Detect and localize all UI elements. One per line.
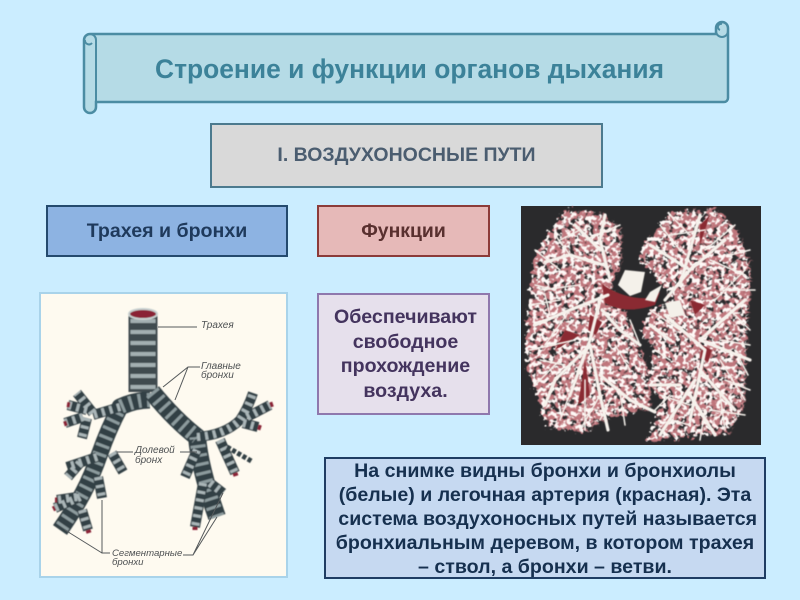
label: trachea and bronchi: Трахея и бронхи (87, 220, 247, 242)
title scroll banner: Строение и функции органов дыхания (155, 54, 664, 84)
caption text block: – ствол, а бронхи – ветви. (418, 556, 672, 578)
label: functions: Функции (361, 220, 446, 242)
caption text block: бронхиальным деревом, в котором трахея (336, 532, 754, 554)
leader lines (65, 327, 223, 555)
caption text block: На снимке видны бронхи и бронхиолы (354, 460, 736, 482)
label: trachea and bronchi (46, 205, 288, 257)
trachea (129, 309, 157, 392)
red bronchus tips (53, 404, 273, 533)
white central trachea stump (618, 270, 685, 318)
photo: bronchial tree cast (521, 206, 761, 445)
label: functions (317, 205, 490, 257)
white main branches (530, 215, 755, 440)
diagram labels: Сегментарные (112, 548, 182, 559)
diagram labels (112, 320, 241, 568)
diagram labels: бронхи (201, 369, 234, 381)
lung masses (red layer) (528, 210, 752, 440)
diagram labels: Долевой (134, 445, 175, 456)
right bronchi (152, 392, 270, 527)
text block: functions description: Обеспечивают (334, 306, 477, 328)
diagram labels: бронхи (112, 557, 144, 568)
white bronchiole web (528, 210, 752, 440)
text block: functions description: свободное (353, 330, 458, 352)
text block: functions description: прохождение (341, 355, 470, 377)
text block: functions description: воздуха. (363, 380, 448, 402)
title scroll banner (82, 20, 730, 114)
section heading: airways (210, 123, 603, 188)
caption text block: (белые) и легочная артерия (красная). Эта (339, 484, 751, 506)
diagram: bronchial tree (39, 292, 288, 578)
text block: functions description (317, 293, 490, 415)
diagram labels: бронх (135, 454, 163, 466)
caption text block (324, 457, 766, 579)
section heading: airways: I. ВОЗДУХОНОСНЫЕ ПУТИ (277, 144, 536, 166)
diagram labels: Главные (201, 361, 241, 372)
caption text block: система воздухоносных путей называется (338, 508, 757, 530)
left bronchi (55, 393, 150, 530)
red pulmonary artery (555, 215, 712, 405)
diagram labels: Трахея (201, 320, 234, 331)
